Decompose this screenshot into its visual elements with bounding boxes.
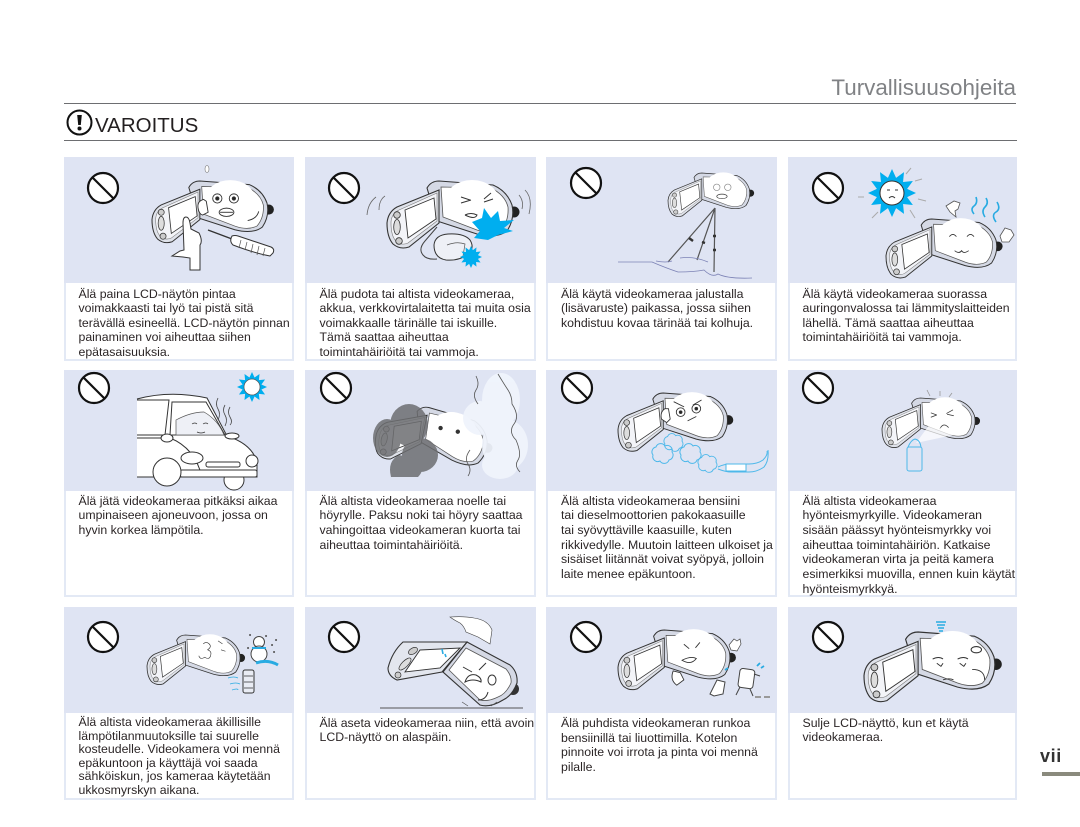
text block: [548, 713, 775, 798]
icon: exclamation in circle: [66, 110, 92, 136]
text block: [307, 713, 534, 798]
panel: do not press LCD: [64, 157, 294, 361]
illustration: camera with running solvent bottles: [546, 607, 777, 713]
illustration: camera pressed on surface: [305, 607, 536, 713]
text block: [790, 713, 1015, 798]
text block: Älä aseta videokameraa niin, että avoin LCD-näyttö on alaspäin.: [320, 716, 534, 744]
text block: Älä altista videokameraa äkillisille lämpötilanmuutoksille tai suurelle kosteudelle. Videokamera voi mennä epäkuntoon ja käyttäjä voi saada sähköiskun, jos kameraa käytetään ukkosmyrskyn aikana.: [78, 715, 280, 796]
text block: Älä altista videokameraa bensiini tai dieselmoottorien pakokaasuille tai syövyttäville kaasuille, kuten rikkivedylle. Muutoin laitteen ulkoiset ja sisäiset liitännät voivat syöpyä, jolloin laite menee epäkuntoon.: [561, 494, 773, 581]
illustration: camera on tripod on rough ground: [546, 157, 777, 283]
text block: Älä paina LCD-näytön pintaa voimakkaasti tai lyö tai pistä sitä terävällä esineellä. LCD-näytön pinnan painaminen voi aiheuttaa siihen epätasaisuuksia.: [78, 286, 290, 359]
text block: Älä jätä videokameraa pitkäksi aikaa umpinaiseen ajoneuvoon, jossa on hyvin korkea lämpötila.: [78, 494, 277, 537]
section title: Turvallisuusohjeita: Turvallisuusohjeita: [831, 74, 1016, 100]
panel: do not leave in car: [64, 370, 294, 597]
panel: no direct sunlight: [788, 157, 1017, 361]
illustration: camera with snowman and bottle: [64, 607, 294, 713]
text block: Älä altista videokameraa noelle tai höyrylle. Paksu noki tai höyry saattaa vahingoittaa videokameran kuorta tai aiheuttaa toimintahäiriöitä.: [320, 494, 523, 552]
panel: temperature and humidity: [64, 607, 294, 800]
panel: no soot or steam: [305, 370, 536, 597]
illustration: dropped camera with impact bursts: [305, 157, 536, 283]
text block: Älä käytä videokameraa jalustalla (lisävaruste) paikassa, jossa siihen kohdistuu kovaa tärinää tai kolhuja.: [561, 286, 753, 330]
text block: [66, 491, 292, 595]
panel: do not use on tripod: [546, 157, 777, 361]
text block: Älä altista videokameraa hyönteismyrkyille. Videokameran sisään päässyt hyönteismyrkky voi aiheuttaa toimintahäiriön. Katkaise videokameran virta ja peitä kamera esimerkiksi muovilla, ennen kuin käytät hyönteismyrkkyä.: [802, 494, 1015, 596]
panel: no insecticide: [788, 370, 1017, 597]
illustration: camera in soot and steam: [305, 370, 536, 491]
illustration: camera under hot sun: [788, 157, 1017, 283]
page number: vii: [1040, 746, 1062, 766]
panel: no benzine: [546, 607, 777, 800]
text block: [790, 283, 1015, 359]
panel: LCD face down: [305, 607, 536, 800]
text block: Älä puhdista videokameran runkoa bensiinillä tai liuottimilla. Kotelon pinnoite voi irrota ja pinta voi mennä pilalle.: [561, 716, 758, 774]
panel: no exhaust gases: [546, 370, 777, 597]
text block: [548, 283, 775, 359]
heading: warning: VAROITUS: [95, 114, 198, 137]
illustration: camera pressed with finger and screwdriver: [64, 157, 294, 283]
text block: Älä käytä videokameraa suorassa auringonvalossa tai lämmityslaitteiden lähellä. Tämä saattaa aiheuttaa toimintahäiriöitä tai vammoja.: [802, 286, 1010, 344]
illustration: camera sprayed with insecticide: [788, 370, 1017, 491]
panel: close LCD: [788, 607, 1017, 800]
text block: Sulje LCD-näyttö, kun et käytä videokameraa.: [802, 716, 969, 744]
panel: do not drop: [305, 157, 536, 361]
heading: warning: [66, 110, 198, 137]
text block: Älä pudota tai altista videokameraa, akkua, verkkovirtalaitetta tai muita osia voimakkaalle tärinälle tai iskuille. Tämä saattaa aiheuttaa toimintahäiriöitä tai vammoja.: [320, 286, 531, 359]
text block: [307, 491, 534, 595]
illustration: camera in hot car: [64, 370, 294, 491]
illustration: camera and exhaust pipe with fumes: [546, 370, 777, 491]
illustration: sleepy camera with open LCD: [788, 607, 1017, 713]
